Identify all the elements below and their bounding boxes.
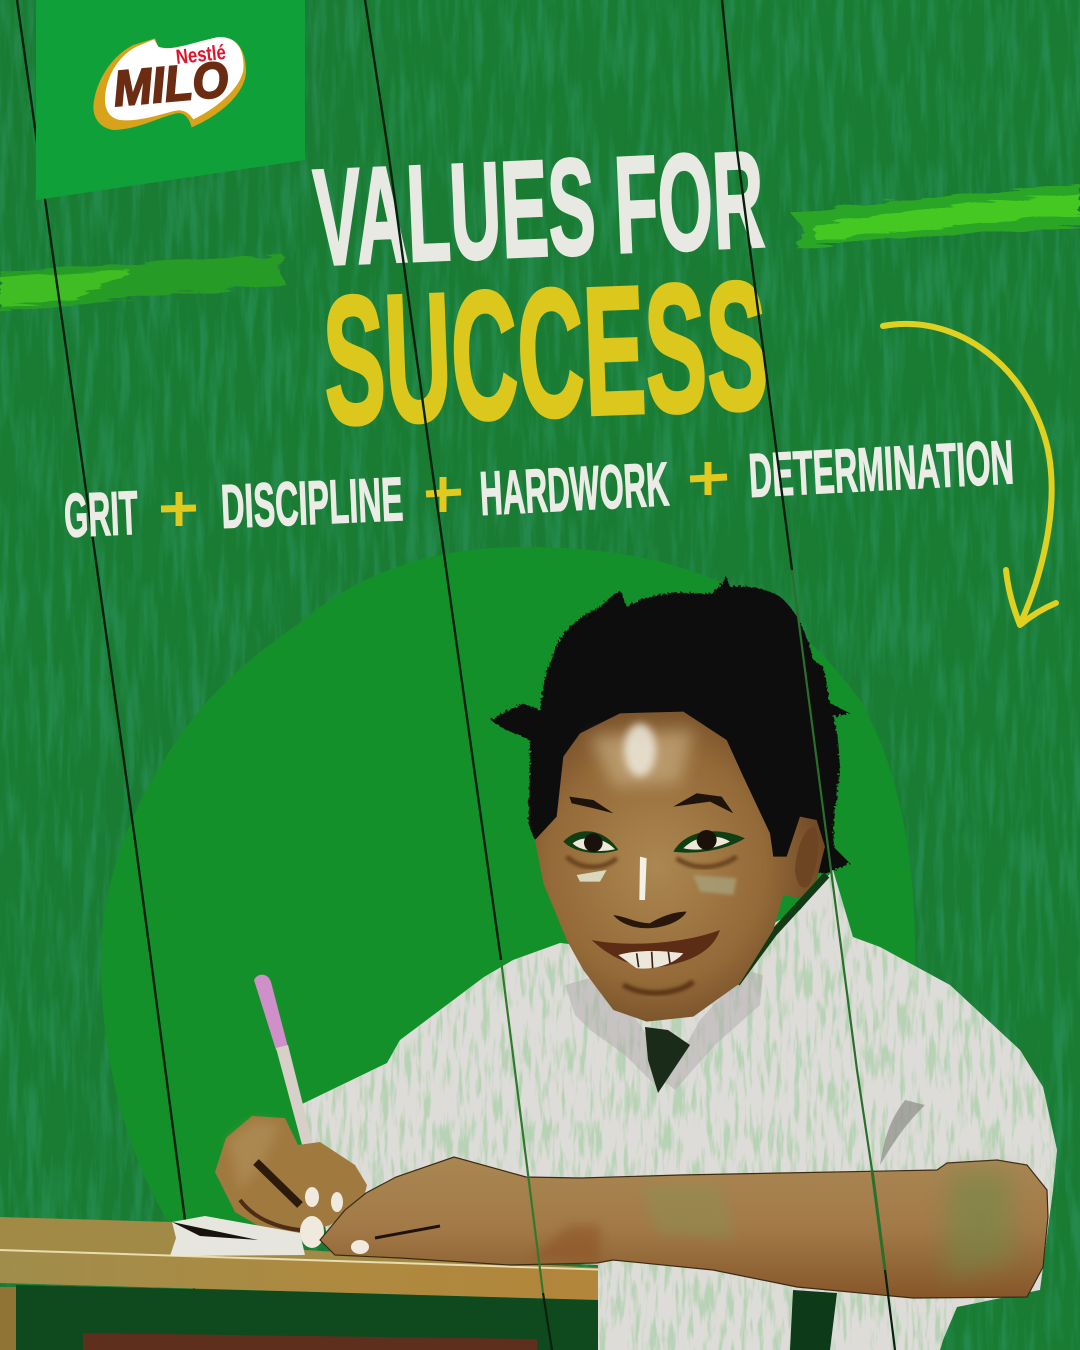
- plus sign 1: [161, 492, 196, 526]
- eyebrows: [569, 793, 733, 813]
- value: DISCIPLINE: DISCIPLINE: [220, 465, 404, 542]
- logo: MILO: [93, 37, 246, 130]
- plank seams over the student: [501, 570, 895, 1350]
- eyes: [563, 831, 745, 853]
- plus sign 3: [690, 462, 727, 495]
- circle behind the student: [101, 547, 915, 1225]
- value: HARDWORK: HARDWORK: [478, 450, 671, 529]
- desk: [0, 1217, 644, 1350]
- notebook paper: [170, 1216, 324, 1256]
- seam line behind logo tab: [17, 0, 93, 540]
- brush stroke: right: [790, 184, 1080, 248]
- illustration: student writing at a desk: [0, 577, 1070, 1350]
- value: GRIT: GRIT: [63, 479, 140, 551]
- hair: [490, 577, 850, 873]
- resting arm: [320, 1157, 1048, 1298]
- brush stroke: left: [0, 255, 286, 312]
- plank seam lines: [93, 0, 792, 1350]
- nose: [613, 912, 687, 928]
- shirt: [290, 860, 1070, 1350]
- ear: [795, 827, 818, 888]
- mouth: [592, 930, 720, 967]
- logo: MILO: Nestlé: [175, 41, 227, 69]
- logo: MILO: MILO: [111, 51, 231, 117]
- pen: [254, 975, 322, 1182]
- writing hand: [215, 1116, 367, 1234]
- arrow: curved yellow: [883, 324, 1056, 625]
- plus sign 2: [426, 477, 461, 512]
- face: [535, 712, 827, 1022]
- panel: MILO logo tab: [36, 0, 305, 200]
